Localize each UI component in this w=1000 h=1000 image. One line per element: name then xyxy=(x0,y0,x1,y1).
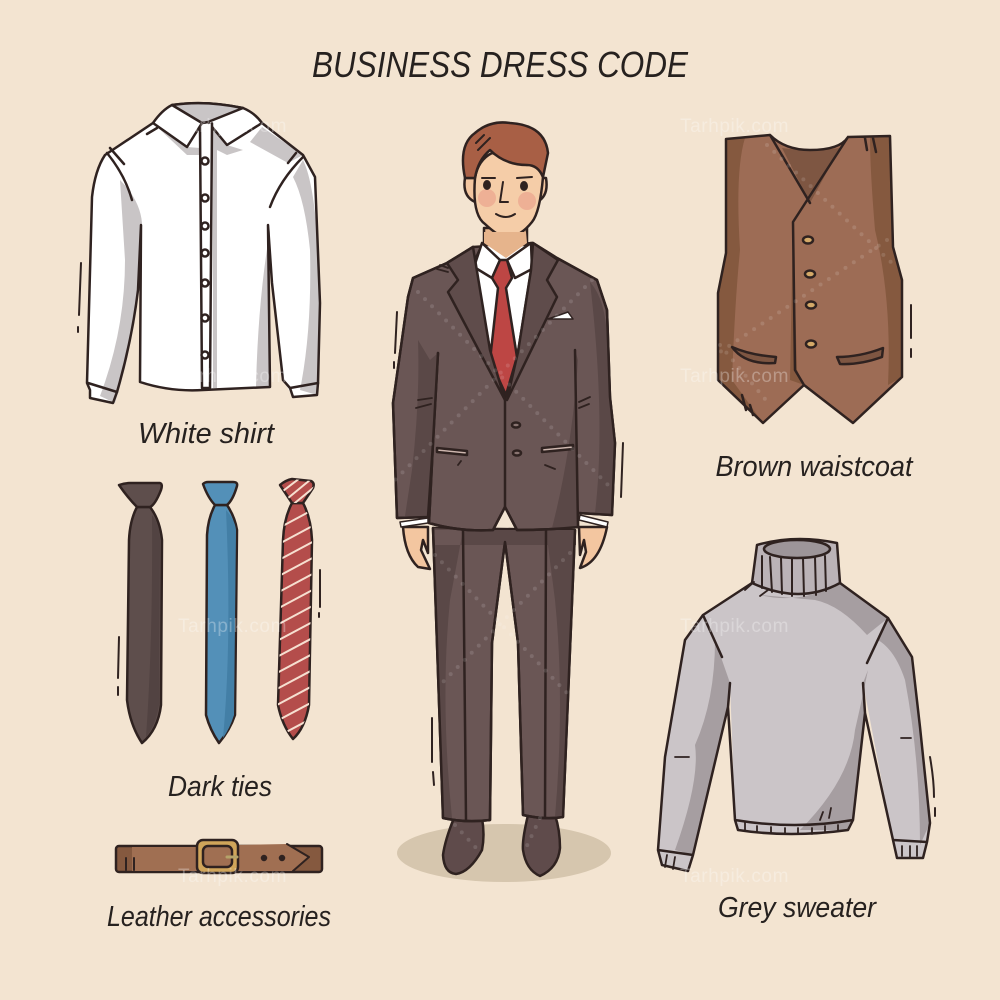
illustration: man in suit xyxy=(393,122,623,882)
jacket details xyxy=(416,265,590,469)
label: leather accessories: Leather accessories xyxy=(107,901,331,933)
icon: white shirt xyxy=(78,103,320,403)
icon: three ties xyxy=(118,478,320,743)
label: brown waistcoat: Brown waistcoat xyxy=(716,451,914,483)
watermark text: Tarhpik.com xyxy=(680,866,789,887)
ears xyxy=(464,178,547,202)
watermark text: Tarhpik.com xyxy=(680,116,789,137)
watermark text: Tarhpik.com xyxy=(178,616,287,637)
icon: grey sweater xyxy=(658,539,935,871)
red striped tie xyxy=(276,478,315,740)
jacket xyxy=(393,243,615,530)
red tie xyxy=(490,260,517,395)
shirt front xyxy=(474,245,532,398)
blue tie xyxy=(203,482,237,743)
face xyxy=(474,153,543,237)
pocket square xyxy=(548,312,573,319)
icon: brown waistcoat xyxy=(718,135,911,423)
shoes xyxy=(443,815,560,876)
cheeks xyxy=(478,189,496,207)
lapels xyxy=(447,243,558,400)
dark tie xyxy=(119,483,162,743)
neck fill xyxy=(484,232,527,258)
watermark dots on figure xyxy=(393,280,610,850)
trousers xyxy=(433,528,576,821)
watermark text: Tarhpik.com xyxy=(178,866,287,887)
watermark text xyxy=(178,116,789,887)
watermark text: Tarhpik.com xyxy=(178,366,287,387)
neck xyxy=(484,228,527,258)
hair xyxy=(463,122,548,178)
watermark text: Tarhpik.com xyxy=(680,616,789,637)
watermark text: Tarhpik.com xyxy=(680,366,789,387)
cuffs xyxy=(400,515,608,527)
label: white shirt: White shirt xyxy=(138,418,276,450)
hands xyxy=(403,527,607,569)
collar xyxy=(474,243,532,278)
icon: belt xyxy=(116,840,322,873)
facial features xyxy=(476,135,532,217)
watermark text: Tarhpik.com xyxy=(178,116,287,137)
motion lines xyxy=(394,312,623,785)
label: grey sweater: Grey sweater xyxy=(718,892,877,924)
title: BUSINESS DRESS CODE xyxy=(312,44,689,85)
right cheek xyxy=(518,192,536,210)
label: dark ties: Dark ties xyxy=(168,771,272,803)
